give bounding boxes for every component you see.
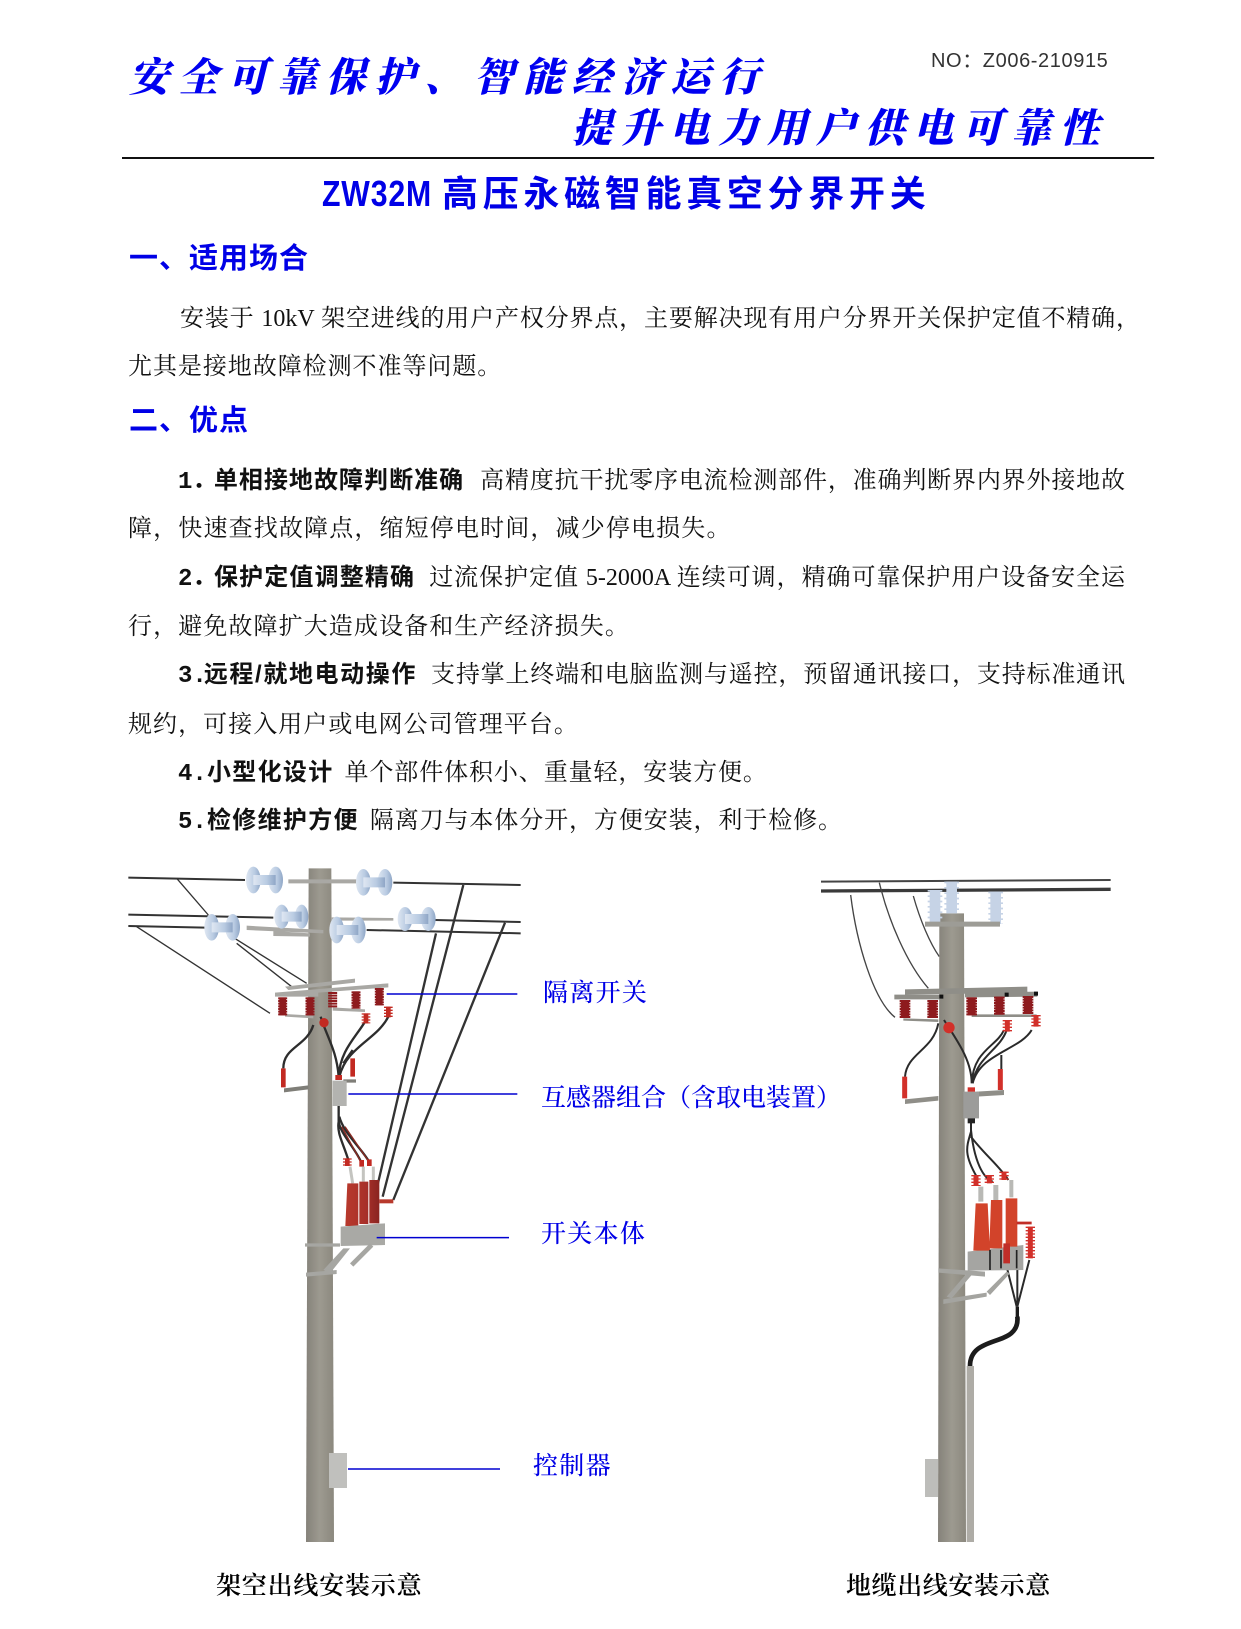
isolating switch	[905, 996, 1028, 1018]
cables and arresters	[283, 1017, 388, 1163]
insulators	[204, 867, 436, 943]
controller	[329, 1453, 347, 1488]
heading: advantages: 二、优点	[129, 405, 249, 437]
overhead wires	[821, 880, 1111, 882]
caption: overhead outlet: 架空出线安装示意	[216, 1573, 422, 1600]
current transformer assembly	[963, 1092, 979, 1118]
slogan line 2: 提升电力用户供电可靠性	[572, 97, 1108, 154]
advantage 3: 3.	[178, 663, 207, 690]
text: applications line 2: 尤其是接地故障检测不准等问题。	[128, 354, 502, 380]
heading: applications: 一、适用场合	[129, 243, 309, 275]
switch body	[305, 1180, 393, 1277]
crossarms	[247, 879, 393, 1018]
callout lines	[348, 994, 517, 1469]
diagram: overhead outlet installation	[128, 867, 521, 1542]
advantage 1 continued: 障，快速查找故障点，缩短停电时间，减少停电损失。	[128, 516, 732, 542]
overhead wires	[128, 878, 521, 1203]
label: controller: 控制器	[533, 1453, 612, 1480]
label: isolating switch: 隔离开关	[543, 980, 648, 1007]
pole	[306, 868, 334, 1542]
cable conduit	[967, 1366, 974, 1542]
main title: 高压永磁智能真空分界开关	[442, 173, 930, 214]
diagram: cable outlet installation	[821, 880, 1111, 1542]
advantage 5: 5.	[178, 809, 207, 836]
crossarms	[894, 987, 1037, 1022]
current transformer assembly	[333, 1081, 347, 1106]
advantage 2 continued: 行，避免故障扩大造成设备和生产经济损失。	[128, 614, 630, 640]
advantage 2: 2．	[178, 566, 216, 593]
header rule	[122, 157, 1154, 159]
advantage 3: 远程/就地电动操作 支持掌上终端和电脑监测与遥控，预留通讯接口，支持标准通讯	[203, 661, 1125, 688]
arresters	[943, 1022, 955, 1033]
cables	[905, 1020, 1032, 1307]
pole	[938, 913, 966, 1542]
label: switch body: 开关本体	[541, 1221, 646, 1248]
advantage 4: 小型化设计 单个部件体积小、重量轻，安装方便。	[207, 759, 768, 786]
label: transformer assembly: 互感器组合（含取电装置）	[541, 1085, 841, 1112]
controller	[925, 1459, 938, 1497]
advantage 3 continued: 规约，可接入用户或电网公司管理平台。	[128, 712, 579, 738]
text: applications line 1: 安装于 10kV 架空进线的用户产权分界点，主要解决现有用户分界开关保护定值不精确，	[180, 306, 1140, 332]
advantage 1: 单相接地故障判断准确 高精度抗干扰零序电流检测部件，准确判断界内界外接地故	[213, 467, 1125, 494]
insulators	[935, 882, 996, 924]
advantage 5: 检修维护方便 隔离刀与本体分开，方便安装，利于检修。	[207, 807, 843, 834]
switch body	[938, 1180, 1032, 1304]
main title: ZW32M	[322, 173, 432, 214]
caption: cable outlet: 地缆出线安装示意	[846, 1573, 1051, 1600]
advantage 1: 1．	[178, 469, 216, 496]
document number: NO：Z006-210915	[931, 50, 1108, 72]
slogan line 1: 安全可靠保护、智能经济运行	[129, 46, 769, 103]
isolating switch	[283, 988, 379, 1015]
advantage 4: 4.	[178, 761, 207, 788]
advantage 2: 保护定值调整精确 过流保护定值 5-2000A 连续可调，精确可靠保护用户设备安全运	[213, 564, 1125, 591]
